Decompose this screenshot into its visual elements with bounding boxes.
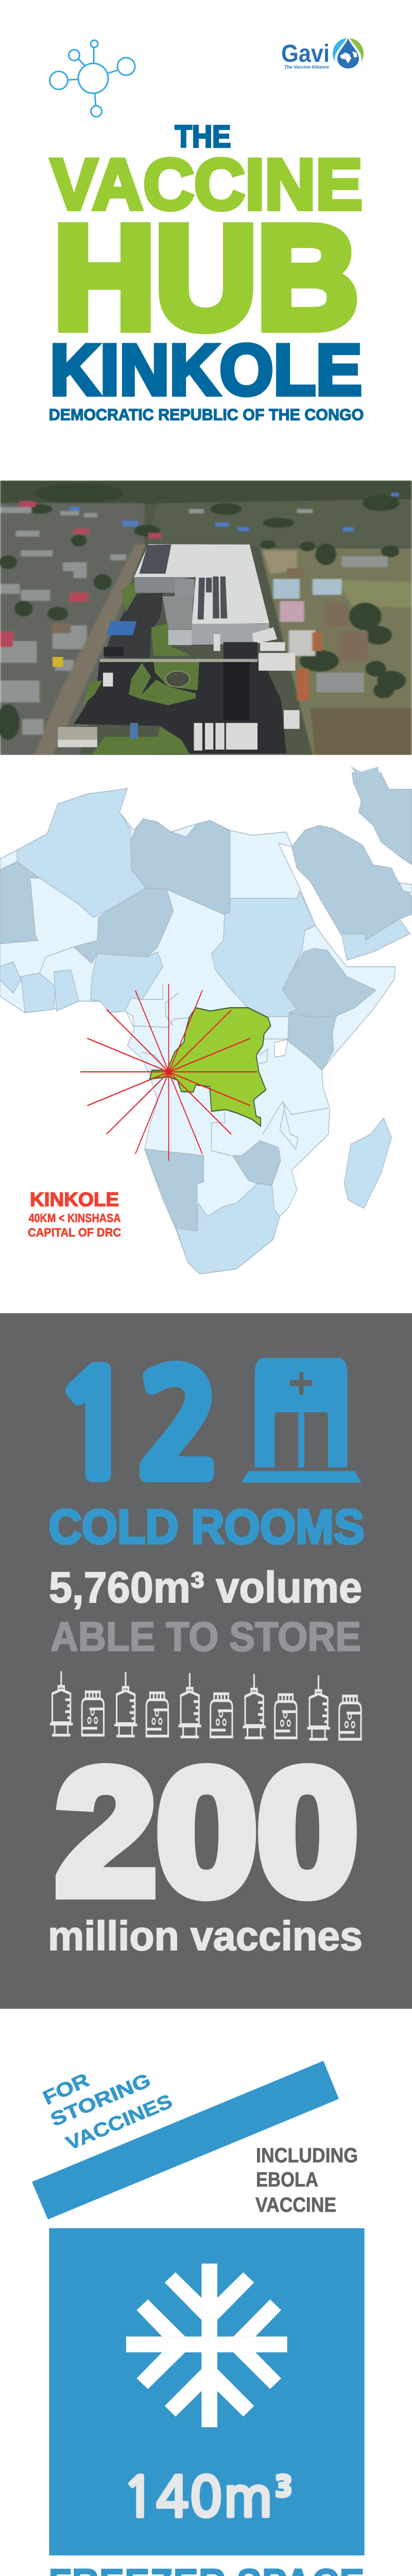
- text: including ebola vaccine: INCLUDING: [256, 2144, 358, 2167]
- icons: row of syringes and vials: [50, 1671, 361, 1739]
- panel: freezer space: [32, 2061, 365, 2576]
- vehicles: [103, 634, 300, 751]
- header: [49, 35, 364, 423]
- title: VACCINE: [50, 144, 363, 225]
- text: volume: 5,760m³ volume: [49, 1563, 362, 1612]
- text: able to store: ABLE TO STORE: [50, 1614, 361, 1659]
- map label: [28, 1189, 121, 1239]
- map: radiating lines from Kinkole: [80, 984, 257, 1161]
- logo: Gavi: Gavi: [281, 40, 330, 67]
- big number 200: 200: [56, 1733, 358, 1931]
- freezer lid: [32, 2061, 339, 2219]
- asphalt and lawns: [74, 661, 286, 754]
- photo: aerial view of the vaccine hub: [0, 481, 412, 755]
- text: 140 cubic metres: 140m³: [122, 2470, 295, 2526]
- title: THE: [175, 118, 231, 154]
- building: [104, 593, 163, 658]
- text: for storing vaccines: FOR: [40, 2069, 93, 2109]
- map label: 40KM < KINSHASA: [29, 1211, 121, 1225]
- title: HUB: [54, 196, 358, 359]
- text: for storing vaccines: VACCINES: [63, 2091, 176, 2155]
- logo: Gavi: The Vaccine Alliance: [284, 64, 329, 70]
- icon: snowflake: [126, 2264, 287, 2427]
- logo: Gavi: [281, 35, 364, 71]
- heading: cold rooms: COLD ROOMS: [48, 1499, 365, 1554]
- map label: CAPITAL OF DRC: [28, 1226, 121, 1239]
- map: countries: [0, 773, 412, 1274]
- text: including ebola vaccine: [255, 2144, 358, 2216]
- text: including ebola vaccine: EBOLA: [256, 2168, 318, 2191]
- icon: cold room building: [241, 1358, 362, 1483]
- map: Africa with DRC highlighted: [0, 773, 412, 1274]
- title: KINKOLE: [50, 329, 362, 410]
- panel: cold rooms: [0, 1313, 412, 2009]
- text: for storing vaccines: [40, 2069, 176, 2155]
- title: DEMOCRATIC REPUBLIC OF THE CONGO: [49, 405, 364, 423]
- big number 12: 12: [53, 1356, 221, 1498]
- map label: KINKOLE: [30, 1189, 119, 1211]
- map: top edge of Middle East: [351, 766, 379, 773]
- icon: molecule hub: [49, 40, 135, 116]
- map: DRC: [150, 1008, 271, 1126]
- freezer box: [49, 2228, 365, 2555]
- text: including ebola vaccine: VACCINE: [255, 2194, 336, 2216]
- text: million vaccines: million vaccines: [48, 1913, 363, 1959]
- title: [49, 118, 364, 423]
- text: for storing vaccines: STORING: [47, 2070, 154, 2131]
